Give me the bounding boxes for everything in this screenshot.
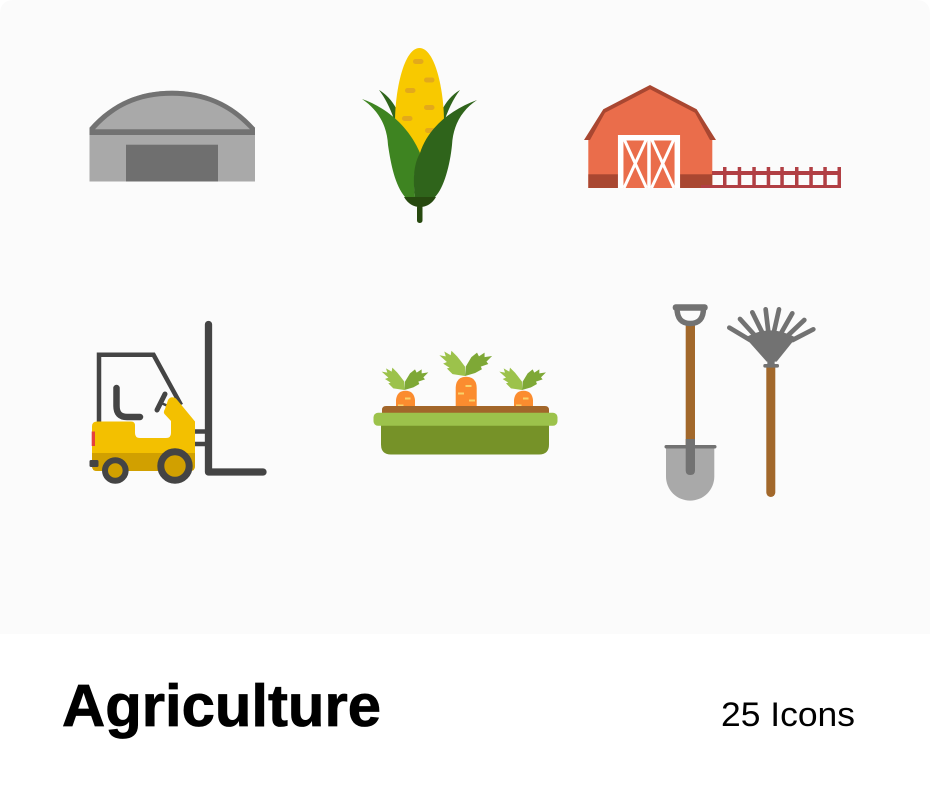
icon: warehouse bbox=[90, 91, 255, 182]
planter rim bbox=[374, 413, 558, 426]
icon: barn with fence bbox=[584, 85, 841, 188]
icon: shovel bbox=[664, 304, 716, 501]
icon: rake bbox=[729, 309, 813, 492]
soil bbox=[382, 406, 549, 414]
centre carrot bbox=[439, 351, 492, 407]
barn door bbox=[618, 135, 680, 188]
icon: forklift bbox=[90, 324, 263, 481]
fence bbox=[701, 167, 841, 188]
right carrot bbox=[499, 368, 546, 407]
icon: corn bbox=[362, 48, 477, 223]
left carrot bbox=[382, 368, 428, 407]
icon count: 25 Icons bbox=[721, 696, 855, 734]
icon: carrot planter bbox=[374, 351, 558, 454]
title: Agriculture bbox=[62, 673, 381, 739]
planter body bbox=[381, 424, 549, 454]
